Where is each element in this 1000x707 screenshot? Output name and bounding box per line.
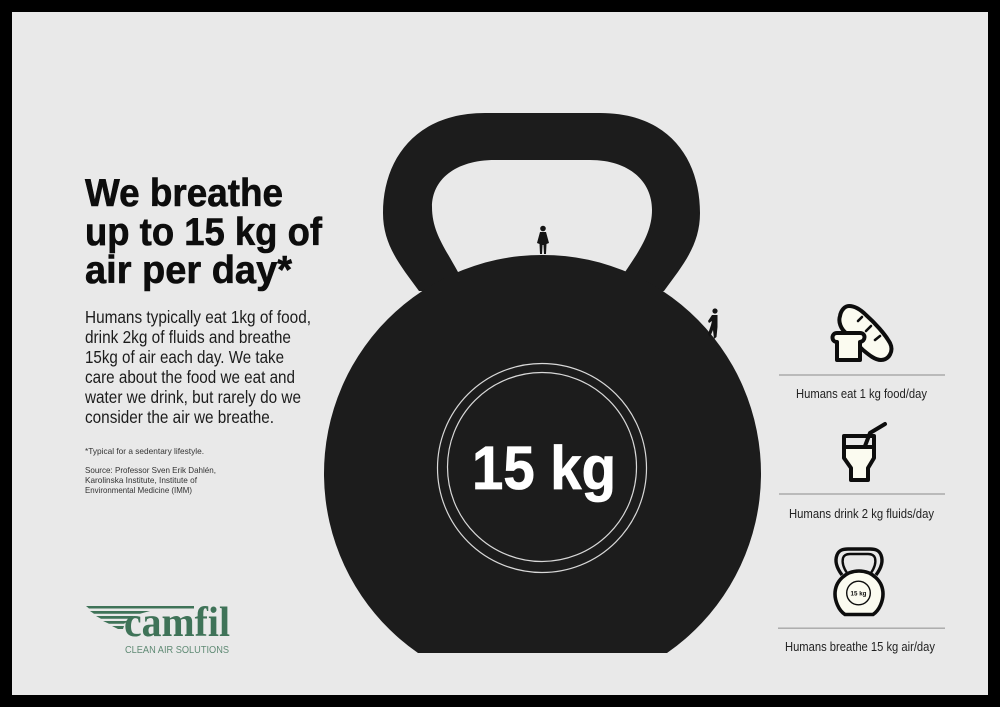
label: Humans breathe 15 kg air/day: [785, 640, 936, 654]
logo: camfil: [86, 600, 230, 656]
item: food: [779, 306, 945, 401]
kettlebell handle: [383, 113, 700, 291]
body text: Humans typically eat 1kg of food,: [85, 307, 311, 327]
body text: 15kg of air each day. We take: [85, 347, 284, 367]
body text: care about the food we eat and: [85, 367, 295, 387]
icon: small kettlebell: 15 kg: [850, 590, 867, 598]
title: We breathe: [85, 172, 283, 215]
item: fluids: [779, 424, 945, 521]
logo wordmark: camfil: [124, 600, 230, 646]
item: air: [778, 549, 945, 654]
person climbing: [708, 308, 718, 339]
kettlebell body: [324, 255, 761, 653]
title: up to 15 kg of: [85, 211, 323, 254]
kettlebell: [324, 113, 761, 653]
logo wings: [86, 606, 194, 629]
title: air per day*: [85, 249, 293, 292]
icon: small kettlebell: [835, 549, 883, 614]
body text: drink 2kg of fluids and breathe: [85, 327, 291, 347]
person standing on top: [537, 226, 549, 254]
title: [85, 172, 323, 292]
divider: [779, 374, 945, 376]
source: Source: Professor Sven Erik Dahlén,: [85, 465, 216, 475]
icon: bread: [832, 306, 891, 360]
source: Karolinska Institute, Institute of: [85, 475, 198, 485]
label: Humans eat 1 kg food/day: [796, 387, 928, 401]
label: Humans drink 2 kg fluids/day: [789, 507, 935, 521]
divider: [779, 494, 945, 495]
body text: water we drink, but rarely do we: [84, 387, 301, 407]
weight label: 15 kg: [472, 434, 616, 502]
logo tagline: CLEAN AIR SOLUTIONS: [125, 644, 229, 656]
source: [85, 465, 216, 495]
body text: [84, 307, 311, 427]
footnote: *Typical for a sedentary lifestyle.: [85, 446, 204, 456]
weight circle inner: [448, 372, 636, 562]
weight circle outer: [438, 364, 646, 572]
divider: [778, 628, 945, 629]
source: Environmental Medicine (IMM): [85, 485, 192, 495]
body text: consider the air we breathe.: [85, 407, 274, 427]
icon: glass with straw: [844, 424, 885, 480]
